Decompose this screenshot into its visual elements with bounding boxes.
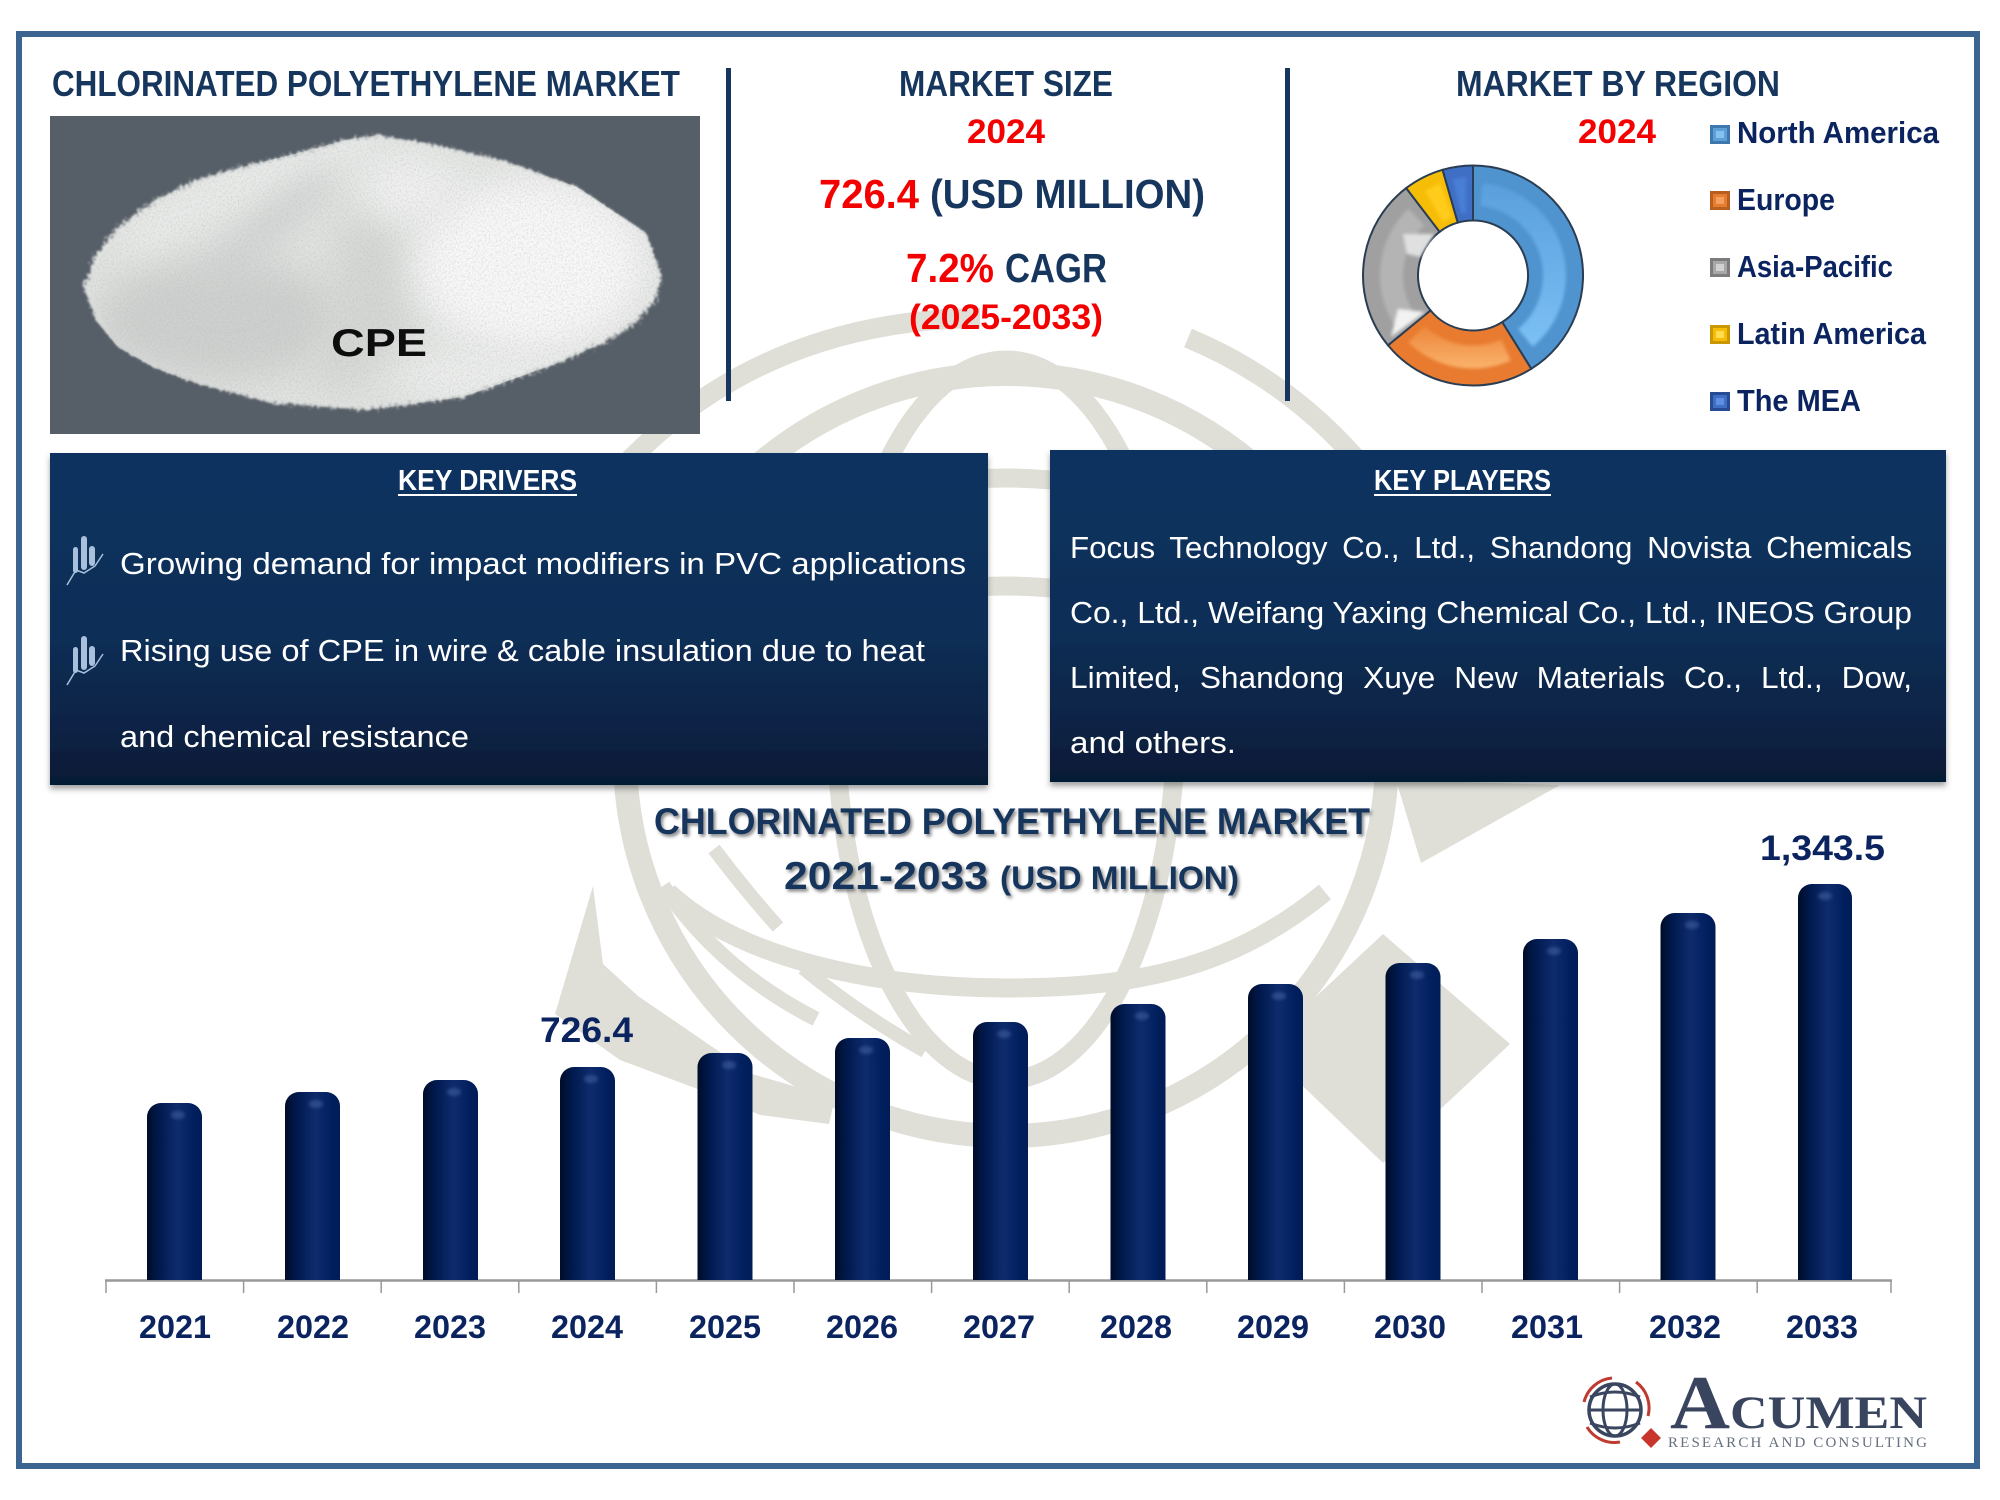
- bar highlights: [171, 892, 1832, 1119]
- chart axis: [105, 1280, 1892, 1293]
- players text: Focus Technology Co., Ltd., Shandong Novista Chemicals: [1070, 530, 1912, 565]
- year labels: 2032: [1649, 1309, 1721, 1345]
- value label: 1,343.5: 1,343.5: [1760, 829, 1885, 868]
- heading: market by region: MARKET BY REGION: [1456, 63, 1780, 104]
- heading: key drivers: KEY DRIVERS: [398, 465, 577, 497]
- photo: CPE powder pile: [50, 116, 700, 434]
- donut bevel highlights: [1380, 177, 1566, 369]
- chart title: [654, 801, 1370, 898]
- year labels: 2030: [1374, 1309, 1446, 1345]
- logo wordmark: CUMEN: [1730, 1387, 1927, 1439]
- bars: [147, 884, 1852, 1280]
- forecast period: (2025-2033): [909, 298, 1103, 337]
- icon: chart bullet 1: [67, 536, 103, 585]
- players text: and others.: [1070, 725, 1236, 760]
- players text: [1070, 530, 1912, 760]
- year labels: 2027: [963, 1309, 1035, 1345]
- legend: asia-pacific: Asia-Pacific: [1737, 249, 1893, 284]
- divider: right: [1285, 68, 1290, 401]
- chart title: CHLORINATED POLYETHYLENE MARKET: [654, 801, 1370, 842]
- players text: Limited, Shandong Xuye New Materials Co., Ltd., Dow,: [1070, 660, 1912, 695]
- background watermark: globe logo: [555, 318, 1560, 1163]
- legend: north america: North America: [1737, 115, 1940, 150]
- panel: market by region: [1363, 63, 1940, 418]
- icon: chart bullet 2: [67, 636, 103, 685]
- year labels: 2029: [1237, 1309, 1309, 1345]
- legend: the mea: The MEA: [1737, 383, 1861, 418]
- logo tagline: RESEARCH AND CONSULTING: [1668, 1435, 1927, 1451]
- bar chart: [105, 829, 1892, 1345]
- panel: key players: [1050, 450, 1946, 782]
- players text: Co., Ltd., Weifang Yaxing Chemical Co., Ltd., INEOS Group: [1070, 595, 1912, 630]
- driver text 2: Rising use of CPE in wire & cable insulation due to heat: [120, 633, 925, 668]
- divider: left: [726, 68, 731, 401]
- year labels: 2024: [551, 1309, 623, 1345]
- legend: europe: Europe: [1737, 182, 1835, 217]
- year labels: [139, 1309, 1858, 1345]
- value: 726.4 USD million: 726.4: [819, 171, 919, 217]
- icon: logo globe: [1584, 1378, 1662, 1449]
- value label: 726.4: 726.4: [540, 1011, 634, 1050]
- year labels: 2023: [414, 1309, 486, 1345]
- legend: latin america: Latin America: [1737, 316, 1927, 351]
- value: 7.2% CAGR: 7.2%: [906, 245, 994, 291]
- title: chlorinated polyethylene market: CHLORINATED POLYETHYLENE MARKET: [52, 63, 680, 104]
- panel: key drivers: [50, 453, 988, 785]
- year labels: 2021: [139, 1309, 211, 1345]
- value: 726.4 USD million: (USD MILLION): [930, 171, 1205, 217]
- heading: market size: MARKET SIZE: [899, 63, 1113, 104]
- year labels: 2031: [1511, 1309, 1583, 1345]
- year labels: 2022: [277, 1309, 349, 1345]
- chart title: (USD MILLION): [1000, 860, 1239, 896]
- year: 2024: 2024: [967, 113, 1045, 151]
- panel: market size: [819, 63, 1205, 337]
- logo wordmark: A: [1670, 1361, 1730, 1445]
- donut chart: [1363, 166, 1583, 386]
- value: 7.2% CAGR: CAGR: [1005, 245, 1107, 291]
- chart title: 2021-2033: [784, 855, 988, 898]
- year labels: 2028: [1100, 1309, 1172, 1345]
- year labels: 2033: [1786, 1309, 1858, 1345]
- year: 2024: 2024: [1578, 113, 1656, 151]
- year labels: 2025: [689, 1309, 761, 1345]
- driver text 2 continued: and chemical resistance: [120, 719, 469, 754]
- driver text 1: Growing demand for impact modifiers in PVC applications: [120, 546, 966, 581]
- photo label: CPE: CPE: [331, 322, 427, 365]
- logo: acumen research and consulting: [1584, 1361, 1927, 1451]
- year labels: 2026: [826, 1309, 898, 1345]
- heading: key players: KEY PLAYERS: [1374, 465, 1551, 497]
